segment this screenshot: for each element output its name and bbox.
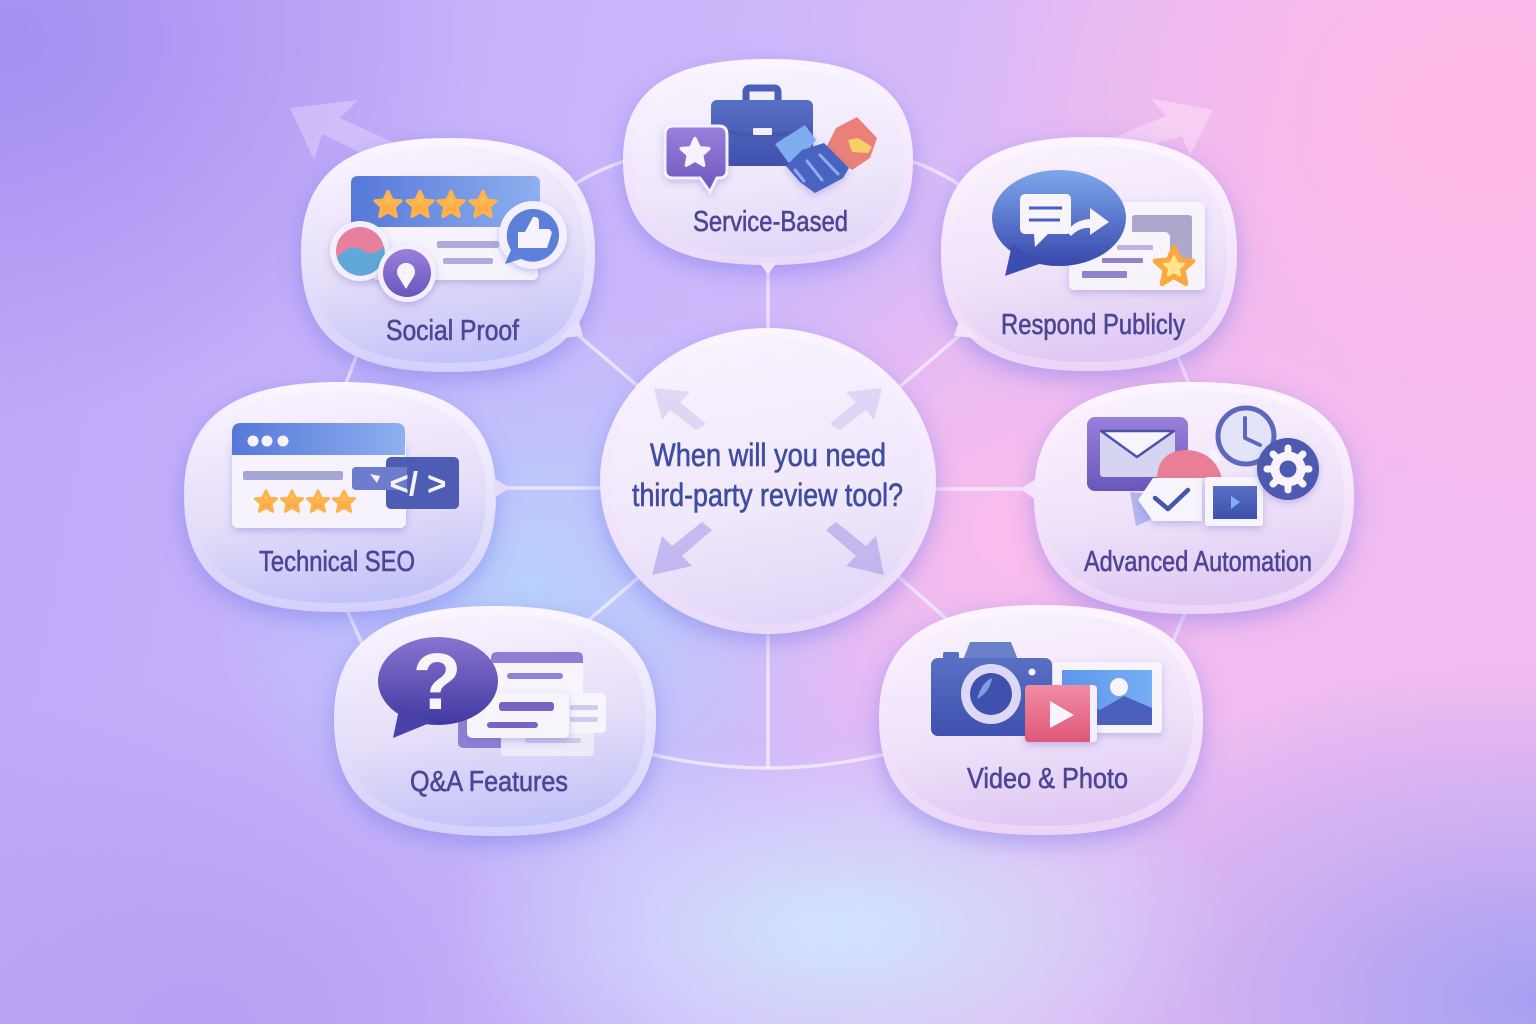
question text bbox=[632, 437, 903, 513]
question mark: ? bbox=[413, 637, 461, 726]
panel: Q&A Features bbox=[334, 606, 656, 836]
icon: reply bubble with review card bbox=[992, 170, 1205, 290]
icon: automation cluster bbox=[1087, 408, 1319, 526]
icon: browser with code bbox=[232, 423, 459, 528]
icon: ratings card bbox=[330, 176, 567, 302]
label: Technical SEO bbox=[259, 546, 415, 578]
arrow: hub bottom left bbox=[652, 522, 712, 575]
label: Q&A Features bbox=[410, 766, 568, 798]
arrow: hub bottom right bbox=[826, 522, 884, 575]
panel: Service-Based bbox=[623, 59, 913, 275]
icon: briefcase and handshake bbox=[665, 88, 877, 193]
code text: </ > bbox=[390, 465, 446, 502]
panel: Video & Photo bbox=[879, 605, 1203, 835]
arrow: background top right bbox=[1112, 98, 1213, 156]
arrow: hub top right bbox=[830, 388, 882, 430]
label: Social Proof bbox=[386, 315, 520, 347]
panel: Respond Publicly bbox=[941, 137, 1237, 371]
icon: camera, photo, video bbox=[931, 642, 1162, 742]
question text: When will you need bbox=[650, 437, 886, 473]
question text: third-party review tool? bbox=[632, 477, 903, 513]
panel: center hub bbox=[600, 328, 936, 634]
panel: Technical SEO bbox=[184, 382, 510, 612]
icon: question bubble and cards bbox=[378, 637, 606, 756]
panel: Advanced Automation bbox=[1020, 382, 1354, 614]
arrow: background top left bbox=[290, 100, 410, 168]
label: Advanced Automation bbox=[1084, 546, 1312, 578]
arrow: hub top left bbox=[654, 388, 706, 430]
connector lines bbox=[345, 160, 1190, 768]
label: Service-Based bbox=[693, 206, 848, 238]
label: Video & Photo bbox=[967, 763, 1128, 795]
label: Respond Publicly bbox=[1001, 309, 1185, 341]
panel: Social Proof bbox=[301, 138, 595, 372]
